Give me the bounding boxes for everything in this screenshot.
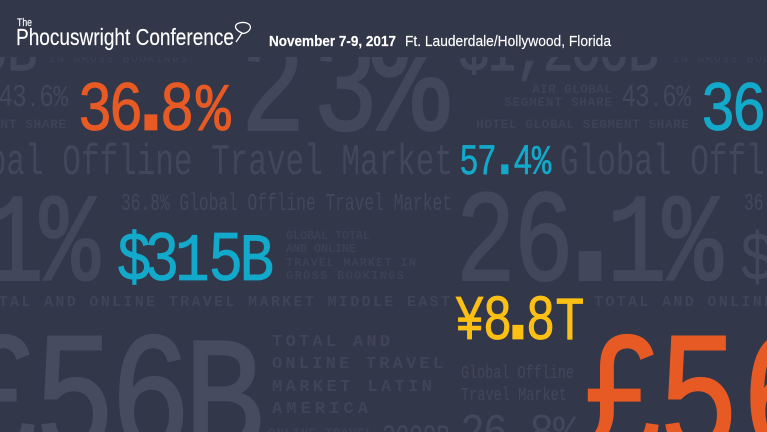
faded 23 percent: 23% xyxy=(243,0,450,179)
blue 36: 36 xyxy=(702,70,765,145)
location: Ft. Lauderdale/Hollywood, Florida xyxy=(405,33,612,50)
faded global total block: GROSS BOOKINGS xyxy=(286,269,404,283)
faded market line: 36.8% Global Offline Travel Market xyxy=(121,191,452,218)
faded latin america block: MARKET LATIN xyxy=(272,378,432,397)
conference name: Phocuswright Conference xyxy=(16,24,234,50)
faded 43.6 left: 43.6% xyxy=(0,78,68,116)
faded air global: AIR GLOBAL xyxy=(532,82,612,97)
faded 43.6 right: 43.6% xyxy=(622,78,691,116)
faded global offline block xyxy=(461,364,574,406)
faded latin america block xyxy=(272,333,443,419)
faded global total block: TRAVEL MARKET IN xyxy=(286,256,416,270)
faded global offline block: Global Offline xyxy=(461,364,574,384)
faded latin america block: TOTAL AND xyxy=(272,333,390,352)
date: November 7-9, 2017 xyxy=(269,33,396,50)
faded 26.1 right: 26.1% xyxy=(458,110,723,320)
yellow 8.8T: ¥8.8T xyxy=(455,256,584,359)
header band xyxy=(0,0,767,57)
blue 315B: $315B xyxy=(118,220,274,300)
faded global total block: AND ONLINE xyxy=(286,242,356,256)
icon: speech bubble xyxy=(235,22,250,42)
faded latin america block: ONLINE TRAVEL xyxy=(272,355,443,374)
blue 57.4 percent: 57.4% xyxy=(460,117,552,187)
faded segment share: SEGMENT SHARE xyxy=(504,95,612,110)
faded in gross bookings left: IN GROSS BOOKINGS xyxy=(49,54,187,66)
orange 36.8 percent: 36.8% xyxy=(79,38,231,153)
faded 1,200B: $1,200B xyxy=(460,19,658,88)
faded hotel segment share: HOTEL GLOBAL SEGMENT SHARE xyxy=(476,117,689,132)
the label: The xyxy=(17,17,32,29)
faded global total block: GLOBAL TOTAL xyxy=(286,229,370,243)
faded global total block xyxy=(286,229,416,283)
faded global offline block: Travel Market xyxy=(461,386,567,406)
faded latin america block: AMERICA xyxy=(272,400,369,419)
